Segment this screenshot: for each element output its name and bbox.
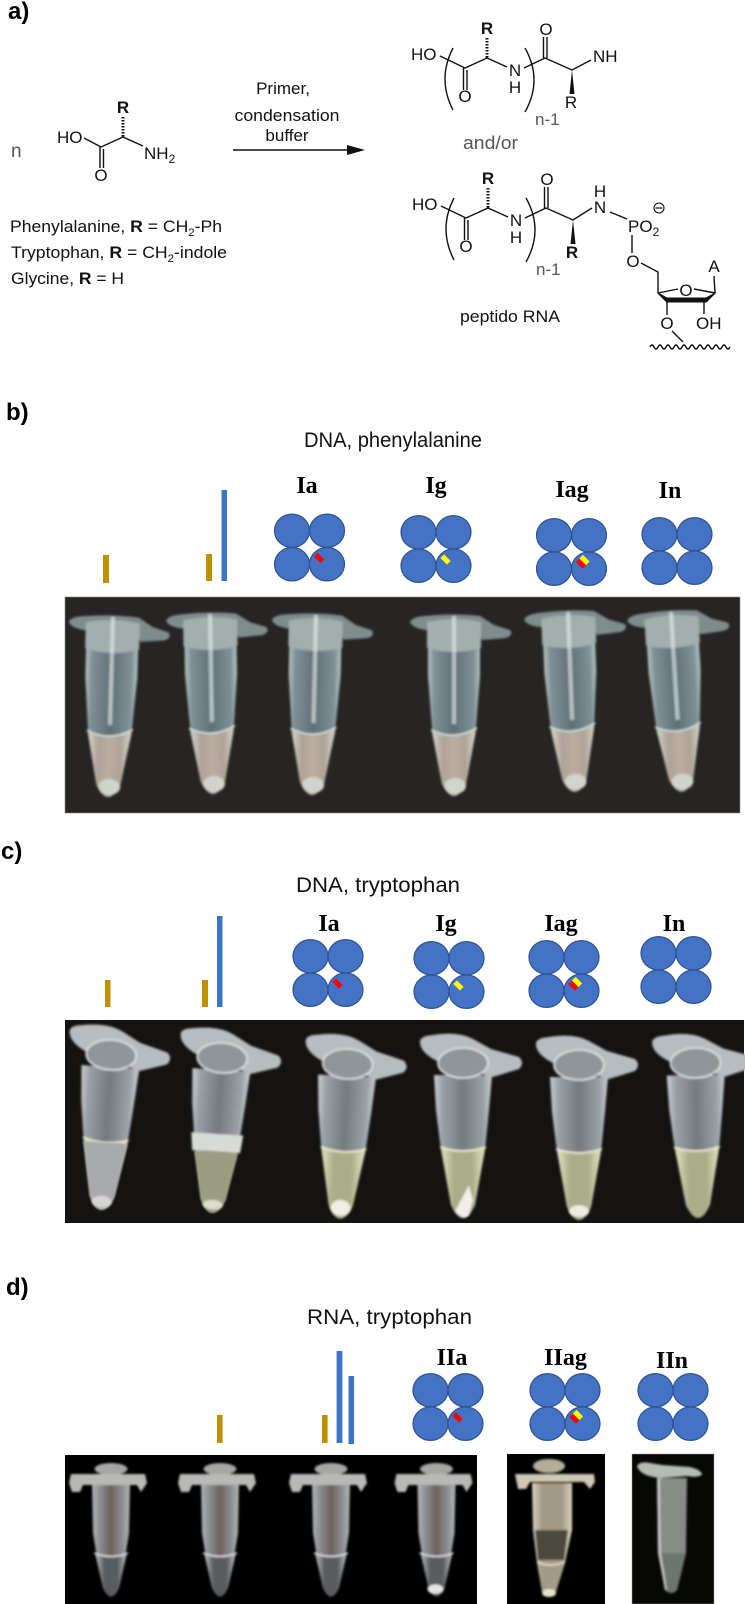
- photo of six tubes, tryptophan: [58, 1020, 745, 1223]
- product 2: peptido RNA: N: [510, 211, 522, 230]
- amino acid key: -indole: [174, 243, 227, 262]
- product 1: peptide: NH: [593, 47, 618, 66]
- quadruplex icon IIag: [530, 1374, 600, 1440]
- label Ig: Ig: [425, 473, 447, 499]
- primer bar: [103, 555, 109, 583]
- amino acid key: Glycine, R = H: [11, 269, 124, 288]
- product 1: peptide: R: [565, 93, 577, 112]
- photo of tube IIag: [507, 1454, 605, 1604]
- photo of four tubes, RNA: [65, 1455, 477, 1604]
- quadruplex icon IIa: [413, 1374, 483, 1440]
- photo of six tubes, phenylalanine: [64, 597, 740, 813]
- product 2: peptido RNA: O: [660, 314, 674, 333]
- reactant amino acid structure: 2: [169, 152, 176, 166]
- product 2: peptido RNA: N: [594, 198, 606, 217]
- product 1: peptide: O: [539, 20, 553, 39]
- amino acid key: Phenylalanine, R = CH: [10, 217, 187, 236]
- panel b: DNA, phenylalanine: [6, 399, 740, 813]
- product 2: peptido RNA: [412, 169, 730, 349]
- product 2: peptido RNA: OH: [696, 314, 722, 333]
- product 2: peptido RNA: O: [459, 237, 473, 256]
- panel d: RNA, tryptophan: [6, 1274, 714, 1604]
- quadruplex icon Iag: [536, 519, 606, 585]
- product 1: peptide: O: [458, 87, 472, 106]
- panel a: reaction scheme: [8, 0, 730, 349]
- product 2: peptido RNA: HO: [412, 195, 438, 214]
- quadruplex icon In: [641, 937, 711, 1003]
- reactant amino acid structure: R: [117, 98, 129, 117]
- product 1: peptide: n-1: [535, 110, 560, 129]
- reactant amino acid structure: HO: [57, 128, 82, 147]
- heading c: c): [1, 838, 22, 865]
- reactant coefficient: n: [11, 141, 22, 162]
- product 2: peptido RNA: A: [708, 257, 720, 276]
- primer bar: [105, 980, 110, 1007]
- reactant amino acid structure: [57, 98, 176, 185]
- and/or label: and/or: [463, 133, 518, 153]
- reactant amino acid structure: NH: [144, 144, 169, 163]
- quadruplex icon IIn: [638, 1374, 708, 1440]
- quadruplex icon Iag: [529, 941, 599, 1007]
- label IIa: IIa: [437, 1345, 467, 1371]
- product 2: peptido RNA: n-1: [536, 260, 561, 279]
- product 2: peptido RNA: R: [482, 169, 494, 188]
- product 1: peptide: [411, 19, 618, 129]
- quadruplex icon In: [642, 518, 712, 584]
- quadruplex icon Ig: [414, 942, 484, 1008]
- primer and template bars: [322, 1351, 354, 1444]
- amino acid key: Tryptophan, R = CH: [11, 243, 166, 262]
- quadruplex icon Ia: [293, 940, 363, 1006]
- product 2: peptido RNA: O: [626, 252, 640, 271]
- product 2: peptido RNA: O: [679, 281, 693, 300]
- label Ia: Ia: [318, 911, 340, 937]
- product 2: peptido RNA: PO: [628, 217, 653, 236]
- product 1: peptide: N: [509, 61, 521, 80]
- product 2: peptido RNA: 2: [653, 225, 660, 239]
- reactant amino acid structure: O: [94, 166, 108, 185]
- reaction conditions: Primer,: [256, 79, 310, 98]
- label Ig: Ig: [435, 911, 457, 937]
- primer and template bars: [206, 490, 227, 581]
- product 2: peptido RNA: O: [540, 170, 554, 189]
- label Ia: Ia: [296, 473, 318, 499]
- primer bar: [217, 1415, 223, 1443]
- label Iag: Iag: [555, 477, 589, 503]
- product 1: peptide: HO: [411, 45, 436, 64]
- label In: In: [659, 478, 681, 504]
- product 2: peptido RNA: H: [510, 228, 522, 247]
- label IIag: IIag: [544, 1345, 587, 1371]
- product 2: peptido RNA: H: [594, 182, 606, 201]
- label IIn: IIn: [656, 1348, 688, 1374]
- product 1: peptide: H: [509, 78, 521, 97]
- product 1: peptide: R: [481, 19, 493, 38]
- reaction conditions: buffer: [265, 126, 309, 145]
- heading b: b): [6, 399, 29, 426]
- reaction conditions: [234, 79, 340, 145]
- amino acid key: [10, 217, 227, 288]
- product 2: peptido RNA: R: [566, 243, 578, 262]
- quadruplex icon Ia: [274, 514, 344, 581]
- reaction conditions: condensation: [234, 106, 340, 125]
- amino acid key: 2: [188, 227, 195, 239]
- panel d title: RNA, tryptophan: [307, 1306, 472, 1329]
- label In: In: [663, 911, 685, 937]
- photo of tube IIn: [632, 1454, 714, 1604]
- heading d: d): [6, 1274, 29, 1301]
- label Iag: Iag: [544, 911, 578, 937]
- panel c title: DNA, tryptophan: [296, 874, 460, 897]
- primer and template bars: [202, 916, 222, 1007]
- peptido RNA label: peptido RNA: [460, 307, 561, 326]
- reaction arrow: [233, 145, 365, 155]
- panel b title: DNA, phenylalanine: [304, 429, 482, 452]
- panel c: DNA, tryptophan: [1, 838, 745, 1223]
- amino acid key: -Ph: [195, 217, 222, 236]
- amino acid key: 2: [168, 253, 174, 265]
- quadruplex icon Ig: [401, 516, 471, 582]
